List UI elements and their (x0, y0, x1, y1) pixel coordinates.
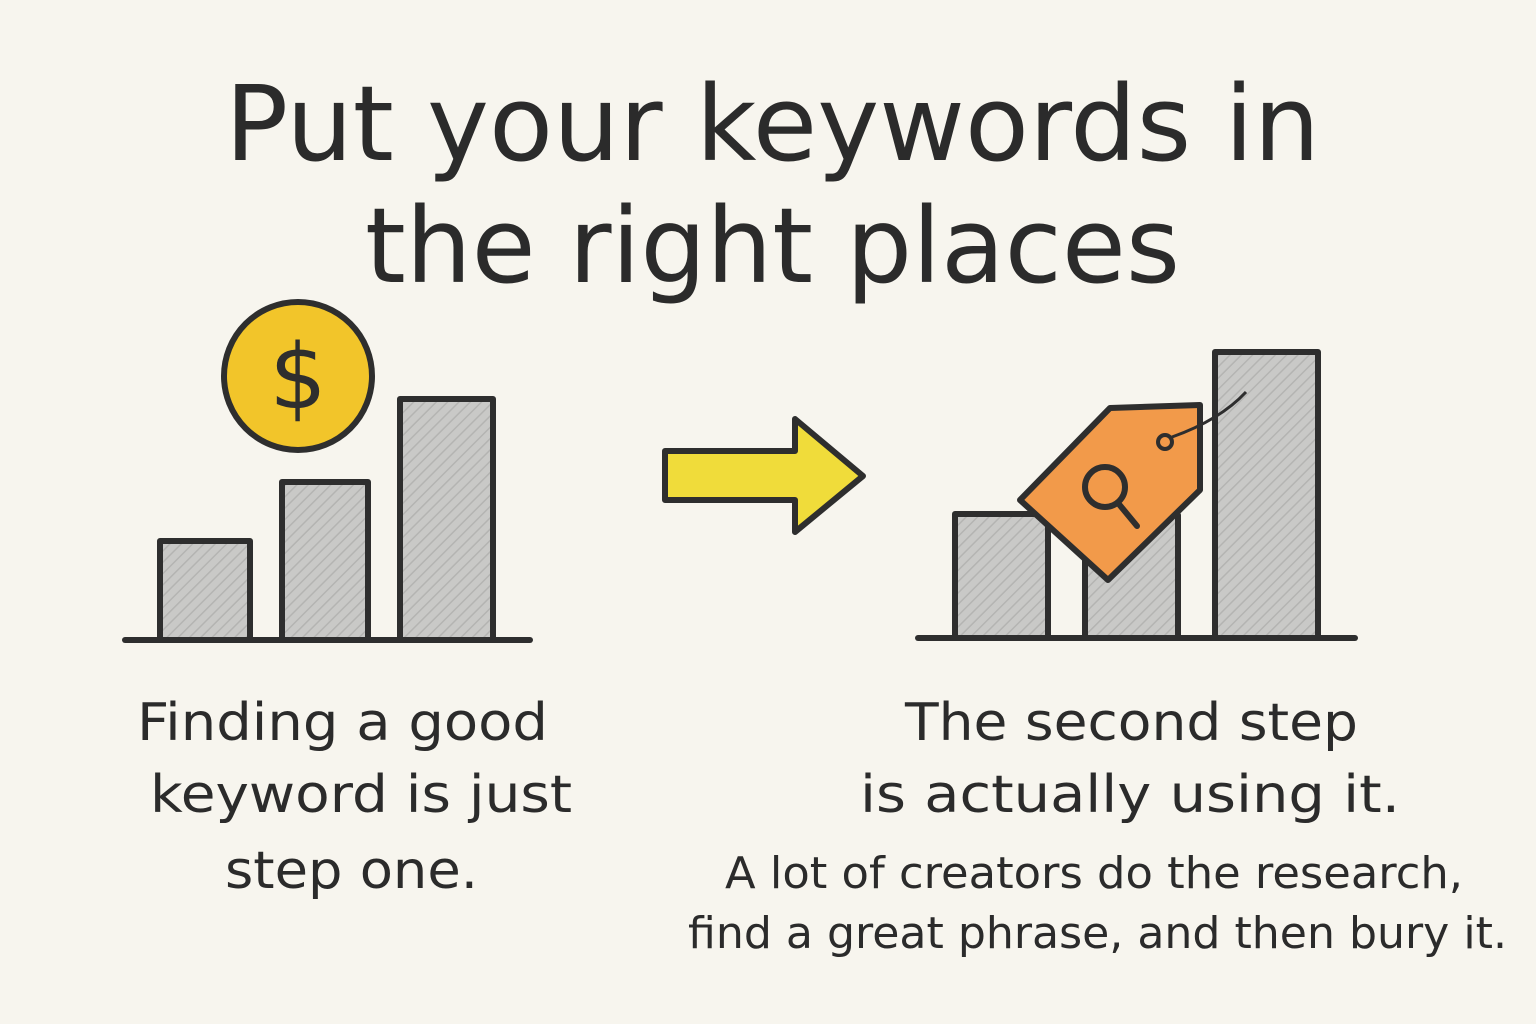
text: left caption: keyword is just (150, 765, 572, 825)
text: left caption (137, 693, 572, 901)
icon: dollar coin: $ (269, 325, 327, 430)
text: right caption: is actually using it. (860, 765, 1400, 825)
right chart: bars with tag (918, 352, 1355, 638)
title: Put your keywords in (225, 63, 1320, 185)
text: right caption (860, 693, 1400, 825)
text: left caption: Finding a good (137, 693, 548, 753)
title: the right places (365, 185, 1180, 307)
text: right subcaption: A lot of creators do the research, (725, 848, 1463, 899)
icon: orange tag with magnifier (1020, 392, 1246, 580)
arrow (665, 419, 863, 532)
text: right subcaption (688, 848, 1507, 959)
text: left caption: step one. (225, 841, 478, 901)
icon: dollar coin (224, 302, 372, 450)
text: right caption: The second step (904, 693, 1358, 753)
left chart: bars with coin (125, 302, 530, 640)
title (225, 63, 1320, 307)
text: right subcaption: find a great phrase, and then bury it. (688, 908, 1507, 959)
